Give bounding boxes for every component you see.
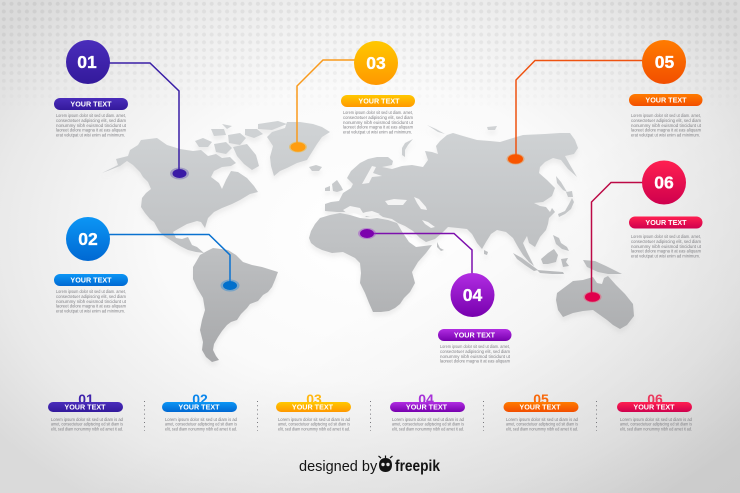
legend item 04: Lorem ipsum dolor sit sed ut diam is ad (392, 417, 465, 422)
legend item 01: Lorem ipsum dolor sit sed ut diam is ad (51, 417, 124, 422)
number badge 06: 06 (654, 172, 674, 192)
label pill 04 (438, 329, 512, 341)
text block 06 (631, 234, 702, 258)
text block 01: laoreet dolore magna it at eas aliquam (56, 128, 126, 133)
text block 01: nonummy nibh euismod tincidunt ut (56, 123, 127, 128)
bottom legend (48, 391, 693, 432)
legend item 02: 02 (192, 391, 208, 407)
text block 06: laoreet dolore magna it at eas aliquam (631, 249, 701, 254)
legend item 04: elit, sed diam nonummy nibh ed amet it ad. (392, 426, 464, 432)
number badge 06 (642, 160, 686, 204)
legend item 03 (276, 391, 351, 432)
text block 02: consectetuer adipiscing elit, sed diam (56, 294, 126, 299)
text block 02: erat volutpat ut wisi enim ad minimum. (56, 308, 125, 314)
legend item 02 (162, 391, 238, 432)
map pin 04 (358, 228, 376, 239)
text block 04: Lorem ipsum dolor sit sed ut diam. amet, (440, 344, 510, 349)
legend item 01: YOUR TEXT (64, 402, 106, 412)
map pin 02 (220, 280, 240, 292)
islands: UK and Ireland (325, 180, 343, 192)
connector line 06 (592, 182, 644, 297)
text block 02: Lorem ipsum dolor sit sed ut diam. amet, (56, 289, 126, 294)
footer credit (299, 456, 440, 475)
legend item 04 (390, 391, 465, 432)
icon: freepik logo (378, 456, 392, 472)
text block 01: erat volutpat ut wisi enim ad minimum. (56, 132, 125, 138)
legend item 01 (48, 391, 124, 432)
text block 04: consectetuer adipiscing elit, sed diam (440, 349, 510, 354)
continent: Eurasia (325, 133, 578, 266)
text block 04: nonummy nibh euismod tincidunt ut (440, 354, 511, 359)
callout 01 (54, 40, 189, 180)
legend item 05: amet, consectetuer adipiscing ed sit diam is (506, 422, 578, 427)
legend item 01: amet, consectetuer adipiscing ed sit diam is (51, 422, 123, 427)
legend item 05 (504, 391, 579, 432)
islands: Russian Arctic (402, 125, 497, 157)
legend item 06: Lorem ipsum dolor sit sed ut diam is ad (620, 417, 693, 422)
text block 05: consectetuer adipiscing elit, sed diam (631, 118, 701, 123)
text block 05: Lorem ipsum dolor sit sed ut diam. amet, (631, 113, 701, 118)
text block 01: Lorem ipsum dolor sit sed ut diam. amet, (56, 113, 126, 118)
text block 03: consectetuer adipiscing elit, sed diam (343, 115, 413, 120)
continent: South America (193, 248, 278, 362)
legend item 03: 03 (306, 391, 322, 407)
text block 05: laoreet dolore magna it at eas aliquam (631, 128, 701, 133)
number badge 05: 05 (655, 52, 674, 72)
connector line 01 (108, 63, 179, 173)
continent: Africa (309, 213, 432, 312)
connector line 04 (367, 234, 472, 275)
text block 06: nonummy nibh euismod tincidunt ut (631, 244, 702, 249)
legend item 04: amet, consectetuer adipiscing ed sit diam is (392, 422, 464, 427)
connector line 02 (108, 234, 230, 285)
number badge 04: 04 (463, 285, 482, 305)
connector line 05 (516, 60, 644, 159)
number badge 05 (642, 40, 686, 84)
map pin 03 (289, 142, 307, 152)
world map (102, 121, 634, 362)
continent: Australia (556, 276, 634, 329)
callout 02 (54, 217, 240, 314)
legend item 05: elit, sed diam nonummy nibh ed amet it ad. (506, 426, 578, 432)
text block 04: laoreet dolore magna it at eas aliquam (440, 359, 510, 364)
legend item 03: YOUR TEXT (292, 402, 334, 412)
legend item 06: YOUR TEXT (633, 402, 675, 412)
callout 06 (584, 160, 702, 302)
text block 01 (56, 113, 127, 138)
footer credit: freepik (395, 458, 440, 475)
map pin 06 (584, 292, 602, 302)
map pin 01 (170, 168, 189, 180)
legend item 06: amet, consectetuer adipiscing ed sit diam is (620, 422, 692, 427)
legend item 06 (617, 391, 693, 432)
text block 03: nonummy nibh euismod tincidunt ut (343, 120, 414, 125)
label pill 01: YOUR TEXT (70, 100, 112, 108)
legend item 02: Lorem ipsum dolor sit sed ut diam is ad (165, 417, 238, 422)
continent: Greenland (267, 122, 330, 176)
islands: Japan and Southeast Asia (437, 176, 622, 274)
text block 03 (343, 110, 414, 134)
legend item 05: Lorem ipsum dolor sit sed ut diam is ad (506, 417, 579, 422)
callout 03 (289, 41, 415, 152)
number badge 03: 03 (366, 53, 386, 73)
label pill 02 (54, 274, 128, 286)
label pill 04: YOUR TEXT (454, 330, 496, 340)
text block 06: erat volutpat ut wisi enim ad minimum. (631, 254, 700, 258)
footer credit: designed by (299, 459, 378, 475)
label pill 02: YOUR TEXT (70, 276, 112, 284)
continent: Arctic islands (195, 121, 287, 170)
inland seas (343, 166, 435, 238)
legend item 02: elit, sed diam nonummy nibh ed amet it ad. (165, 426, 237, 432)
text block 05: erat volutpat ut wisi enim ad minimum. (631, 132, 700, 138)
legend item 06: 06 (647, 391, 663, 407)
label pill 05: YOUR TEXT (645, 96, 687, 104)
legend item 03: Lorem ipsum dolor sit sed ut diam is ad (278, 417, 351, 422)
connector line 03 (297, 60, 356, 147)
callout 05 (506, 40, 702, 164)
legend item 02: YOUR TEXT (178, 402, 220, 412)
map pin 05 (506, 154, 524, 164)
text block 03: laoreet dolore magna it at eas aliquam (343, 125, 413, 130)
text block 02: nonummy nibh euismod tincidunt ut (56, 299, 127, 304)
legend item 04: YOUR TEXT (406, 402, 448, 412)
text block 02: laoreet dolore magna it at eas aliquam (56, 304, 126, 309)
legend item 04: 04 (418, 391, 434, 407)
text block 06: consectetuer adipiscing elit, sed diam (631, 239, 701, 244)
callout 04 (358, 228, 512, 364)
legend item 03: amet, consectetuer adipiscing ed sit diam is (278, 422, 350, 427)
legend item 01: elit, sed diam nonummy nibh ed amet it ad. (51, 426, 123, 432)
number badge 02 (66, 217, 110, 261)
island: Iceland (309, 165, 322, 171)
text block 06: Lorem ipsum dolor sit sed ut diam. amet, (631, 234, 701, 239)
text block 02 (56, 289, 127, 314)
legend item 05: YOUR TEXT (519, 402, 561, 412)
text block 04 (440, 344, 511, 364)
label pill 05 (629, 94, 702, 106)
legend item 02: amet, consectetuer adipiscing ed sit diam is (165, 422, 237, 427)
text block 01: consectetuer adipiscing elit, sed diam (56, 118, 126, 123)
label pill 06 (629, 216, 702, 228)
label pill 06: YOUR TEXT (645, 218, 687, 227)
number badge 01: 01 (77, 52, 97, 72)
number badge 02: 02 (78, 229, 98, 249)
number badge 04 (450, 273, 494, 317)
legend item 06: elit, sed diam nonummy nibh ed amet it ad. (620, 426, 692, 432)
legend item 03: elit, sed diam nonummy nibh ed amet it ad. (278, 426, 350, 432)
legend item 01: 01 (78, 391, 94, 407)
label pill 03: YOUR TEXT (358, 96, 400, 106)
legend item 05: 05 (533, 391, 549, 407)
text block 05 (631, 113, 702, 138)
text block 03: Lorem ipsum dolor sit sed ut diam. amet, (343, 110, 413, 115)
continent: North America (102, 138, 258, 253)
text block 05: nonummy nibh euismod tincidunt ut (631, 123, 702, 128)
text block 03: erat volutpat ut wisi enim ad minimum. (343, 130, 412, 134)
